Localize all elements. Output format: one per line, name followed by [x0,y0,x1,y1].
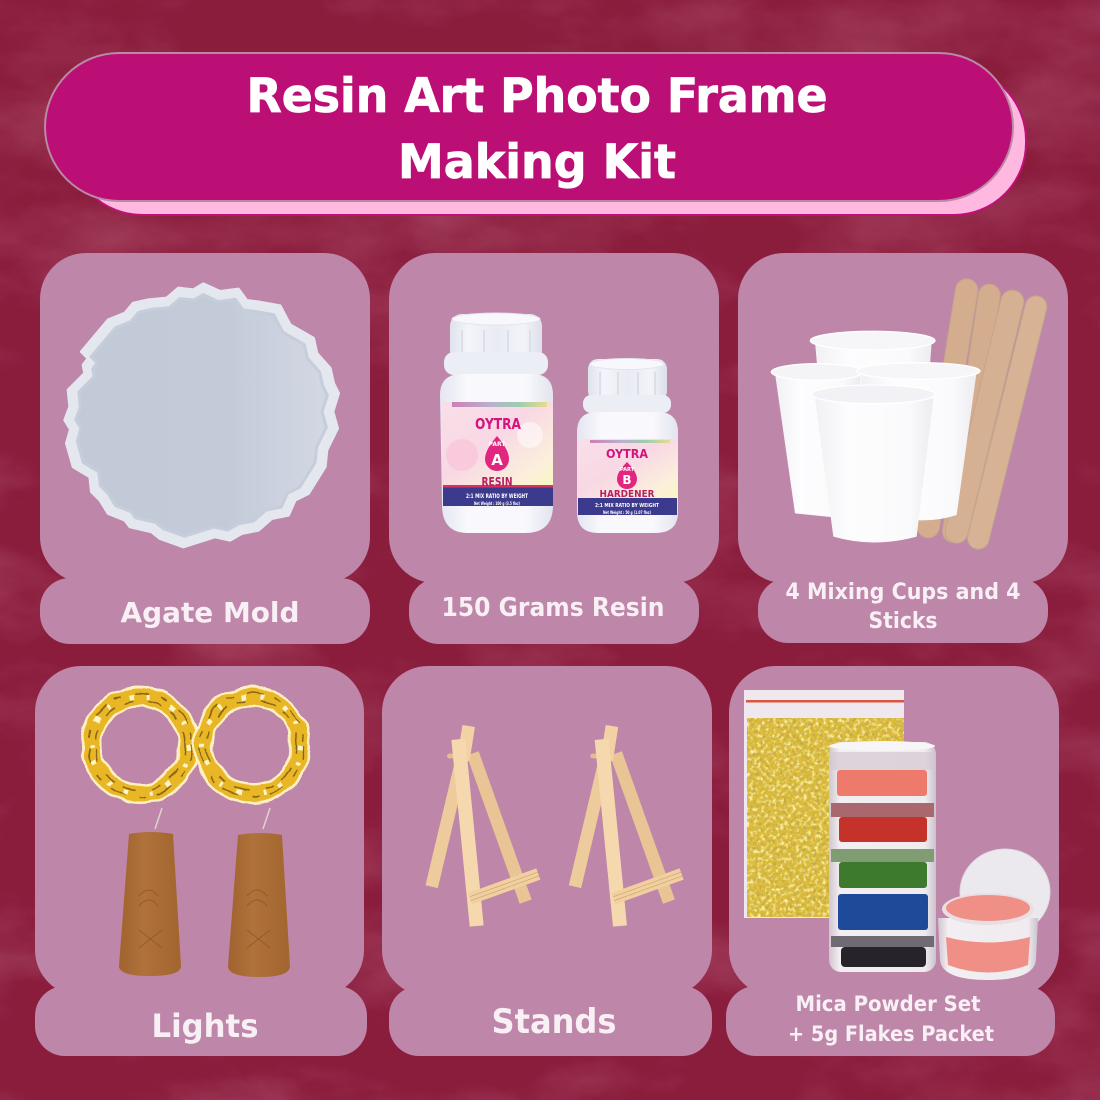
icon: resin bottle part A: Net Weight : 100 g (3.5 floz) [474,501,520,507]
icon: easel stand right [575,726,682,926]
label [788,992,994,1046]
icon: resin bottle part A: OYTRA [475,415,521,433]
icon: resin bottle part A: 2:1 MIX RATIO BY WEIGHT [466,493,529,500]
label: Stands [492,1002,616,1042]
title text: Resin Art Photo Frame [246,69,828,124]
icon: hardener bottle part B: OYTRA [606,447,649,461]
card [35,666,364,996]
panel: mixing cups and sticks [738,253,1068,643]
panel: agate mold [40,253,370,644]
banner shadow layer [70,68,1026,215]
icon: hardener bottle part B: Net Weight : 50 g (1.07 floz) [603,510,651,515]
card [738,253,1068,583]
card [389,253,719,583]
icon: hardener bottle part B: 2:1 MIX RATIO BY WEIGHT [595,503,659,509]
icon: resin bottle part A: A [491,451,503,469]
label [786,580,1020,634]
label pill [726,986,1055,1056]
panel: mica powder and flakes [726,666,1059,1056]
title text [246,69,828,190]
label pill [35,986,367,1056]
icon: resin bottle part A: PART [489,441,506,448]
label: 4 Mixing Cups and 4 [786,580,1020,605]
icon: resin bottle part A [440,313,553,533]
label: Agate Mold [120,596,300,629]
icon: hardener bottle part B [577,358,678,533]
icon: stacked powder jars [829,741,936,972]
icon: hardener bottle part B: PART [620,467,635,473]
label pill [389,986,712,1056]
icon: wooden sticks [928,290,1036,538]
icon: flakes packet [744,690,904,918]
card [382,666,712,996]
label pill [409,578,699,644]
card [40,253,370,583]
panel: lights [35,666,367,1056]
card [729,666,1059,996]
panel: resin [389,253,719,644]
panel: stands [382,666,712,1056]
icon: easel stand left [432,726,539,926]
title banner [45,53,1026,215]
label: Sticks [868,609,938,634]
label: + 5g Flakes Packet [788,1022,994,1046]
icon: fairy light rings [88,693,304,797]
label: Lights [152,1007,258,1045]
icon: paper cups [771,331,980,542]
label: Mica Powder Set [796,992,980,1016]
icon: hardener bottle part B: HARDENER [600,489,655,500]
title text: Making Kit [398,135,676,190]
label pill [40,578,370,644]
icon: cork stoppers [119,808,290,977]
icon: hardener bottle part B: B [622,473,632,487]
icon: agate mold [65,284,338,547]
icon: open powder jar [938,849,1050,980]
label pill [758,578,1048,643]
banner main pill [45,53,1013,201]
label: 150 Grams Resin [442,593,664,623]
icon: resin bottle part A: RESIN [482,475,512,489]
